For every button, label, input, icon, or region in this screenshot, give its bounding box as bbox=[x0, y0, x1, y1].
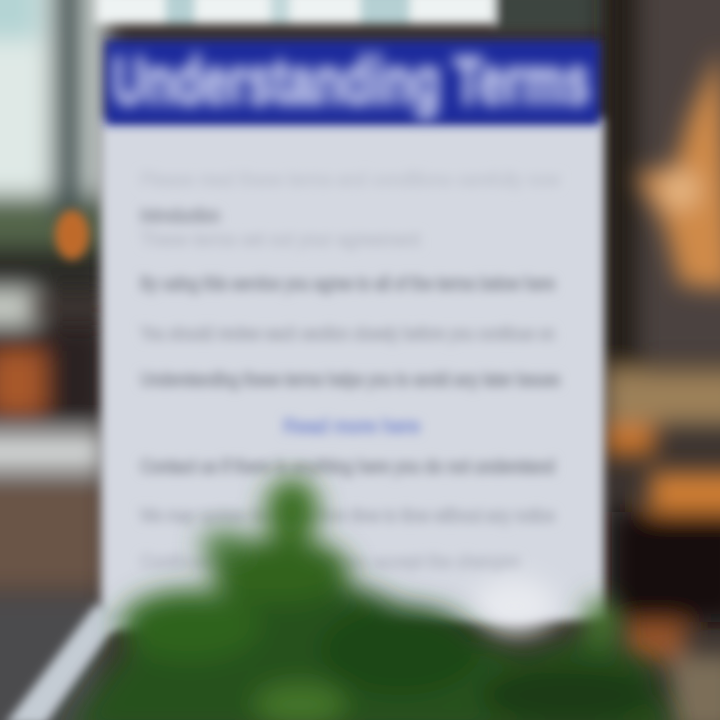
text block: body copy: Please read these terms and conditions carefully now bbox=[140, 170, 560, 191]
text block: body copy: Introduction bbox=[140, 206, 220, 227]
background left: window and shelves bbox=[0, 0, 105, 720]
icon: orange blob on left column bbox=[55, 210, 89, 260]
white strip at lower left of sheet bbox=[5, 605, 125, 720]
text block: body copy: We may update the terms from time to time without any notice bbox=[140, 506, 555, 527]
text block: body copy: Understanding these terms helps you to avoid any later issues bbox=[140, 370, 560, 391]
text block: body copy: Contact us if there is anything here you do not understand bbox=[140, 457, 555, 478]
panel: document card bbox=[101, 40, 604, 630]
text block: body copy: Continued use means that you accept the changes bbox=[140, 552, 520, 573]
header banner bbox=[105, 40, 600, 125]
highlight near lower right of sheet bbox=[473, 578, 557, 634]
icon: orange star decoration bbox=[635, 50, 720, 290]
text block: body copy: These terms set out your agreement bbox=[140, 230, 421, 251]
text block: body copy bbox=[140, 170, 560, 573]
text block: body copy: By using this service you agree to all of the terms below here bbox=[140, 274, 555, 295]
plant foreground bbox=[65, 478, 675, 720]
text block: body copy: You should review each section closely before you continue on bbox=[140, 324, 555, 345]
document sheet bbox=[101, 118, 604, 630]
background top strip: window above document bbox=[95, 0, 605, 30]
background right: dark wood and warm lights bbox=[605, 0, 720, 720]
link text: Read more here bbox=[283, 416, 420, 438]
